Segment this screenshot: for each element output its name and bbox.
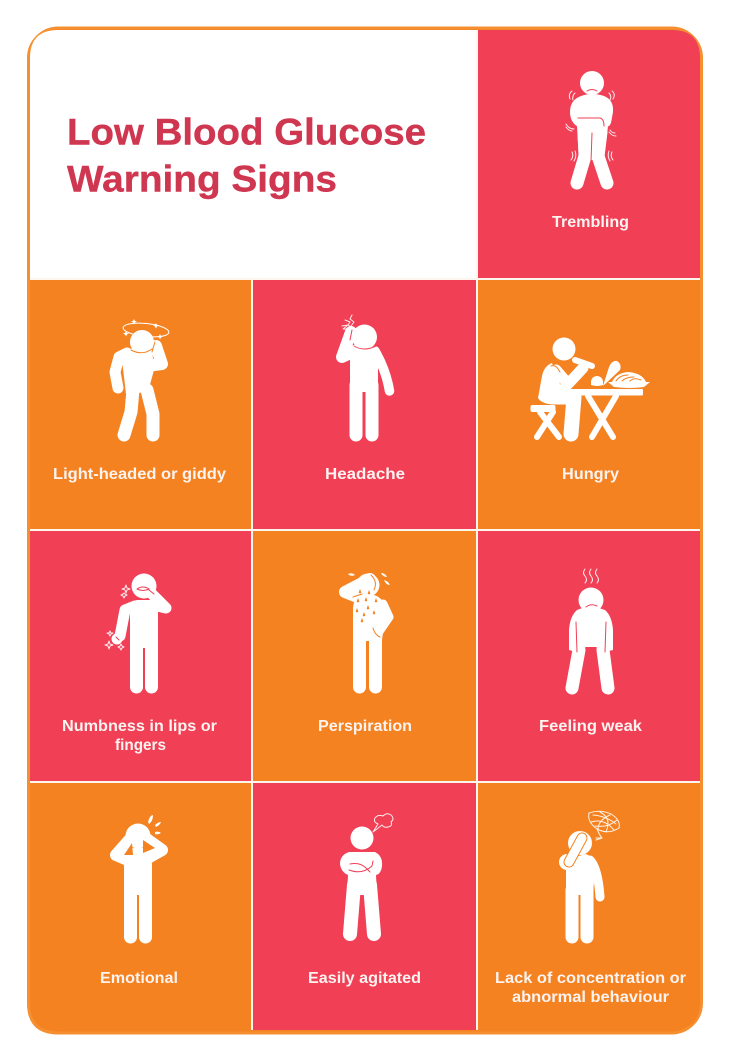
label: Numbness in lips or [62,718,217,735]
panel: headache [253,280,476,529]
panel: perspiration [253,531,476,781]
icon: crying figure [116,815,162,937]
label: abnormal behaviour [512,989,669,1006]
title: Warning Signs [67,158,337,200]
icon: numb figure [105,574,166,687]
icon: confused figure [559,811,619,937]
title: Low Blood Glucose [67,112,426,152]
label: Hungry [562,466,619,483]
icon: trembling figure [566,71,616,183]
panel: numbness [30,531,251,781]
label: Headache [325,466,405,483]
title [67,112,426,200]
panel: emotional [30,783,251,1030]
label: Perspiration [318,718,412,735]
label: Trembling [552,214,629,231]
icon: headache figure [342,315,390,435]
label: Easily agitated [308,970,421,987]
panel: trembling [478,30,700,278]
label [495,970,686,1006]
icon: dizzy figure [115,319,170,435]
panel: easily agitated [253,783,476,1030]
panel: hungry [478,280,700,529]
label: Emotional [100,970,178,987]
panel: feeling weak [478,531,700,781]
panel: light-headed [30,280,251,529]
icon: agitated figure [340,814,393,934]
label: Lack of concentration or [495,970,686,987]
label: Feeling weak [539,718,642,735]
label: Light-headed or giddy [53,466,226,483]
label [62,718,217,754]
panel: lack of concentration [478,783,700,1030]
icon: weak figure [569,569,613,688]
panel: title [30,30,478,278]
icon: person eating at table [530,338,650,437]
icon: sweating figure [345,573,390,687]
label: fingers [115,737,166,754]
